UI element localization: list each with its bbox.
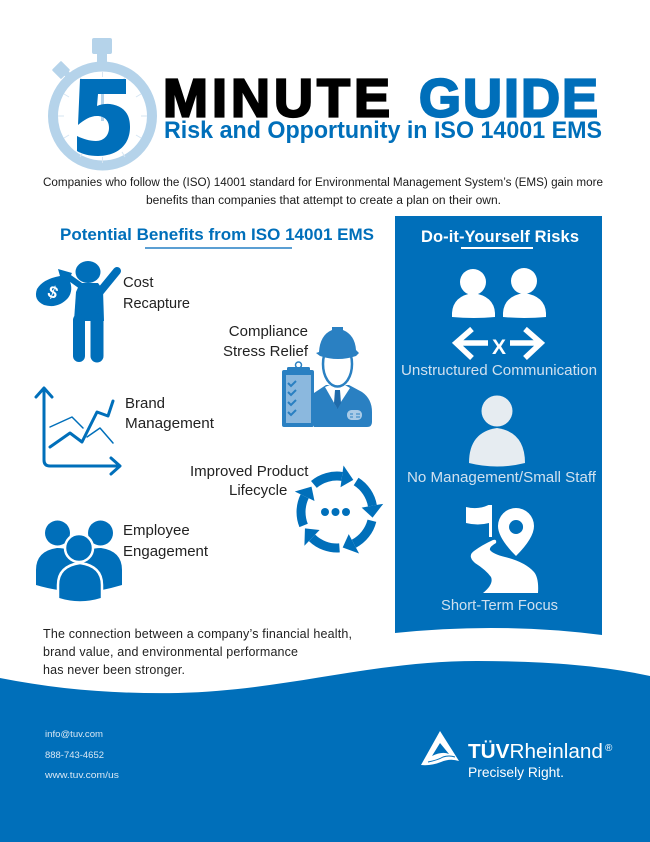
- icon: flag, pin and road: [466, 505, 538, 593]
- registered mark: ®: [605, 743, 613, 754]
- heading: potential benefits: Potential Benefits from ISO 14001 EMS: [60, 225, 374, 244]
- contact details: www.tuv.com/us: [44, 770, 119, 781]
- contact details: [44, 729, 119, 781]
- closing statement: brand value, and environmental performance: [43, 645, 298, 659]
- closing statement: [43, 627, 352, 677]
- label: compliance stress relief: Stress Relief: [223, 343, 309, 360]
- risk: no management or small staff: [407, 396, 597, 486]
- contact details: info@tuv.com: [45, 729, 103, 740]
- tagline: Precisely Right.: [468, 764, 564, 780]
- label: brand management: Management: [125, 415, 215, 432]
- icon: cycle arrows: [286, 466, 386, 563]
- closing statement: has never been stronger.: [43, 663, 185, 677]
- label: employee engagement: [123, 522, 209, 560]
- label: compliance stress relief: [223, 323, 309, 360]
- title: guide: GUIDE: [419, 68, 598, 128]
- contact details: 888-743-4652: [45, 750, 104, 761]
- benefit: improved product lifecycle: [190, 463, 386, 563]
- benefit: employee engagement: [36, 520, 209, 602]
- label: compliance stress relief: Compliance: [229, 323, 308, 340]
- label: brand management: Brand: [125, 395, 165, 412]
- logo: TÜV Rheinland: [421, 731, 613, 780]
- risk: unstructured communication: [401, 268, 597, 379]
- intro text: Companies who follow the (ISO) 14001 standard for Environmental Management System’s (EMS) gain more: [43, 177, 603, 189]
- label: improved product lifecycle: Improved Product: [190, 463, 309, 480]
- benefit: compliance stress relief: [223, 323, 372, 427]
- panel: do-it-yourself risks: [395, 216, 602, 635]
- icon: two people and arrows: X: [492, 336, 506, 359]
- icon: two people and arrows: [452, 268, 546, 359]
- icon: worker with clipboard: [282, 327, 372, 427]
- icon: group of people: [36, 520, 122, 602]
- label: employee engagement: Engagement: [123, 543, 209, 560]
- icon: logo triangle: [421, 731, 459, 765]
- subtitle: Risk and Opportunity in ISO 14001 EMS: [164, 117, 602, 144]
- label: improved product lifecycle: [190, 463, 309, 499]
- icon: person with money bag: $: [45, 282, 61, 303]
- label: improved product lifecycle: Lifecycle: [229, 482, 287, 499]
- wordmark: TÜVRheinland: [468, 740, 603, 763]
- icon: line chart: [36, 388, 120, 474]
- footer wave: [0, 661, 650, 842]
- benefit: cost recapture: [36, 261, 190, 356]
- label: cost recapture: [123, 275, 190, 312]
- label: no management or small staff: No Management/Small Staff: [407, 470, 597, 486]
- label: brand management: [125, 395, 215, 432]
- intro text: benefits than companies that attempt to create a plan on their own.: [146, 195, 501, 207]
- closing statement: The connection between a company’s financial health,: [43, 627, 352, 641]
- risk: short-term focus: [441, 505, 558, 614]
- icon: single person: [469, 396, 525, 466]
- benefit: brand management: [36, 388, 215, 474]
- icon: stopwatch: [52, 38, 152, 166]
- icon: person with money bag: [36, 261, 117, 356]
- label: unstructured communication: Unstructured Communication: [401, 363, 597, 379]
- intro text: [43, 177, 603, 207]
- title: minute: MINUTE: [163, 68, 390, 128]
- heading: do-it-yourself risks: Do-it-Yourself Risks: [421, 228, 579, 246]
- label: cost recapture: Cost: [123, 275, 153, 291]
- label: employee engagement: Employee: [123, 522, 190, 539]
- label: cost recapture: Recapture: [123, 296, 190, 312]
- header: stopwatch and titles: [52, 38, 602, 166]
- label: short-term focus: Short-Term Focus: [441, 598, 558, 614]
